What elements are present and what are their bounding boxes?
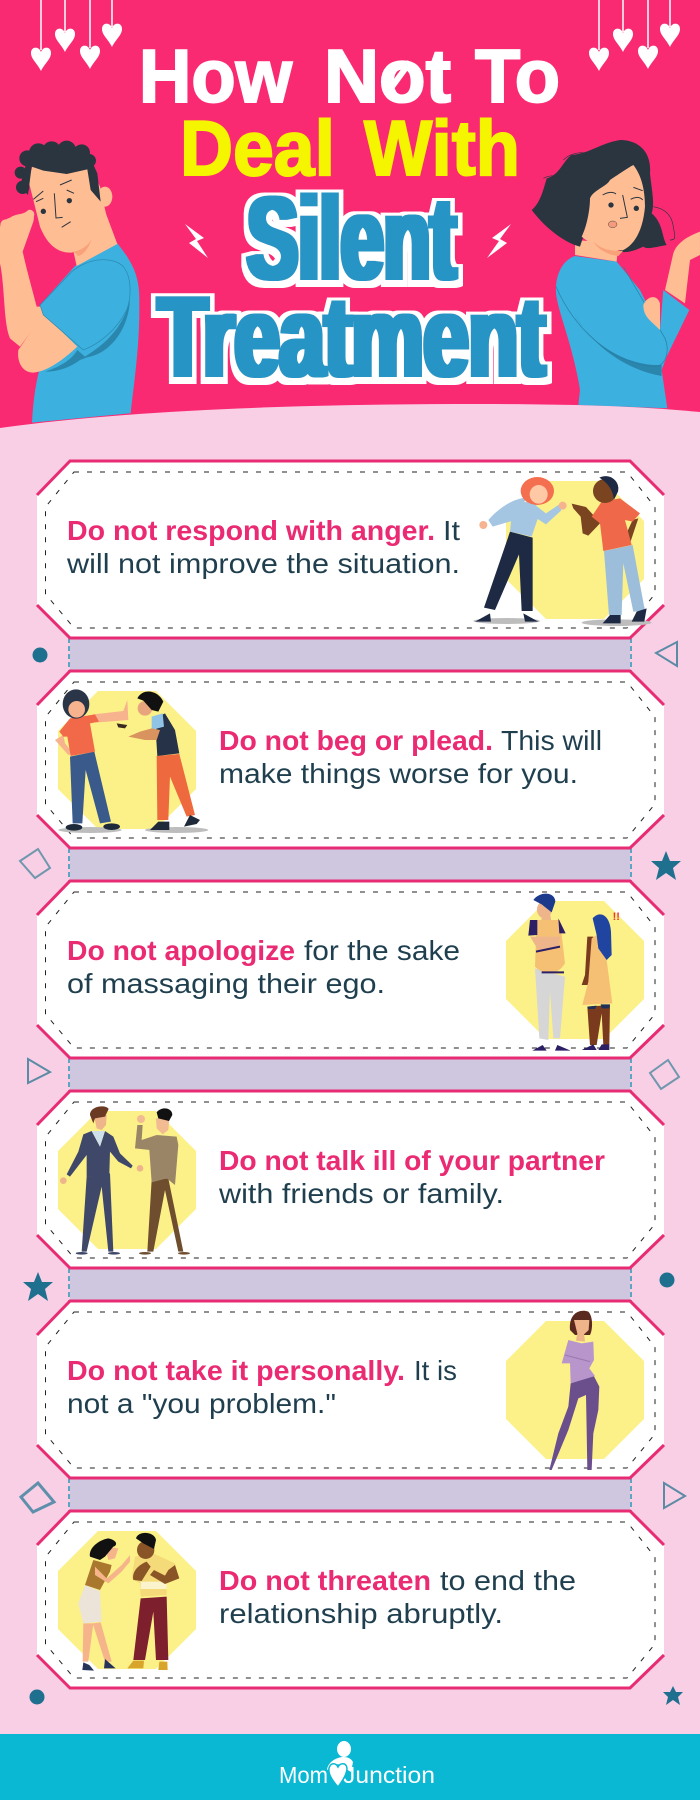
woman illustration	[532, 140, 700, 408]
title line 1: To	[475, 34, 560, 118]
card 2 text: Do not beg or plead.	[219, 725, 493, 756]
card 2	[37, 671, 664, 848]
card 2 text: make things worse for you.	[219, 758, 578, 789]
illustration: man and woman turned away: !!	[613, 911, 620, 923]
card 5	[37, 1301, 664, 1478]
card 6 text	[219, 1565, 576, 1629]
card 1 text: Do not respond with anger.	[67, 515, 435, 546]
card 3 text: for the sake	[304, 935, 460, 966]
illustration: man and woman turned away	[506, 894, 644, 1051]
illustration: woman refusing man	[55, 689, 208, 833]
header panel	[0, 0, 700, 430]
lightning bolt right	[487, 224, 511, 258]
logo: Junction	[343, 1762, 435, 1788]
lightning bolt left	[185, 224, 208, 258]
card 6 text: Do not threaten	[219, 1565, 431, 1596]
card 4 text: Do not talk ill of your partner	[219, 1145, 605, 1176]
illustration: woman with crossed arms	[506, 1311, 644, 1470]
card 6	[37, 1511, 664, 1688]
connector bars	[69, 638, 631, 1511]
card 5 text	[67, 1355, 457, 1419]
card 6 text: to end the	[440, 1565, 576, 1596]
man illustration	[0, 141, 139, 423]
logo: Mom	[279, 1762, 328, 1788]
card 3 text: Do not apologize	[67, 935, 295, 966]
hanging hearts right	[589, 0, 680, 71]
illustration: two men talking	[58, 1106, 196, 1255]
title line 2: Deal	[180, 104, 335, 192]
title line 3: Silent	[247, 173, 456, 305]
title line 4: Treatment	[158, 274, 545, 401]
card 5 text: Do not take it personally.	[67, 1355, 405, 1386]
title line 2: With	[364, 104, 520, 192]
title	[139, 34, 560, 401]
card 1 text: will not improve the situation.	[66, 548, 460, 579]
card 6 text: relationship abruptly.	[219, 1598, 503, 1629]
card 2 text	[219, 725, 602, 789]
title line 2	[180, 104, 520, 192]
footer	[0, 1734, 700, 1800]
card 4 text	[218, 1145, 605, 1209]
card 4 text: with friends or family.	[218, 1178, 504, 1209]
title line 1: Not	[324, 34, 451, 118]
card 1	[37, 461, 664, 638]
decorative shapes	[20, 642, 685, 1705]
header bottom curve	[0, 404, 700, 440]
illustration: arguing couple	[473, 476, 652, 626]
card 4	[37, 1091, 664, 1268]
card 2 text: This will	[501, 725, 602, 756]
title line 1: How	[139, 34, 293, 118]
hanging hearts left	[31, 0, 122, 71]
card 3 text: of massaging their ego.	[67, 968, 385, 999]
logo	[279, 1741, 435, 1788]
title line 1	[139, 34, 560, 118]
card 1 text: It	[443, 515, 460, 546]
card 1 text	[66, 515, 460, 579]
card 3 text	[67, 935, 460, 999]
card 5 text: not a "you problem."	[67, 1388, 336, 1419]
illustration: woman pointing at man	[58, 1531, 196, 1671]
card 3	[37, 881, 664, 1058]
card 5 text: It is	[414, 1355, 457, 1386]
